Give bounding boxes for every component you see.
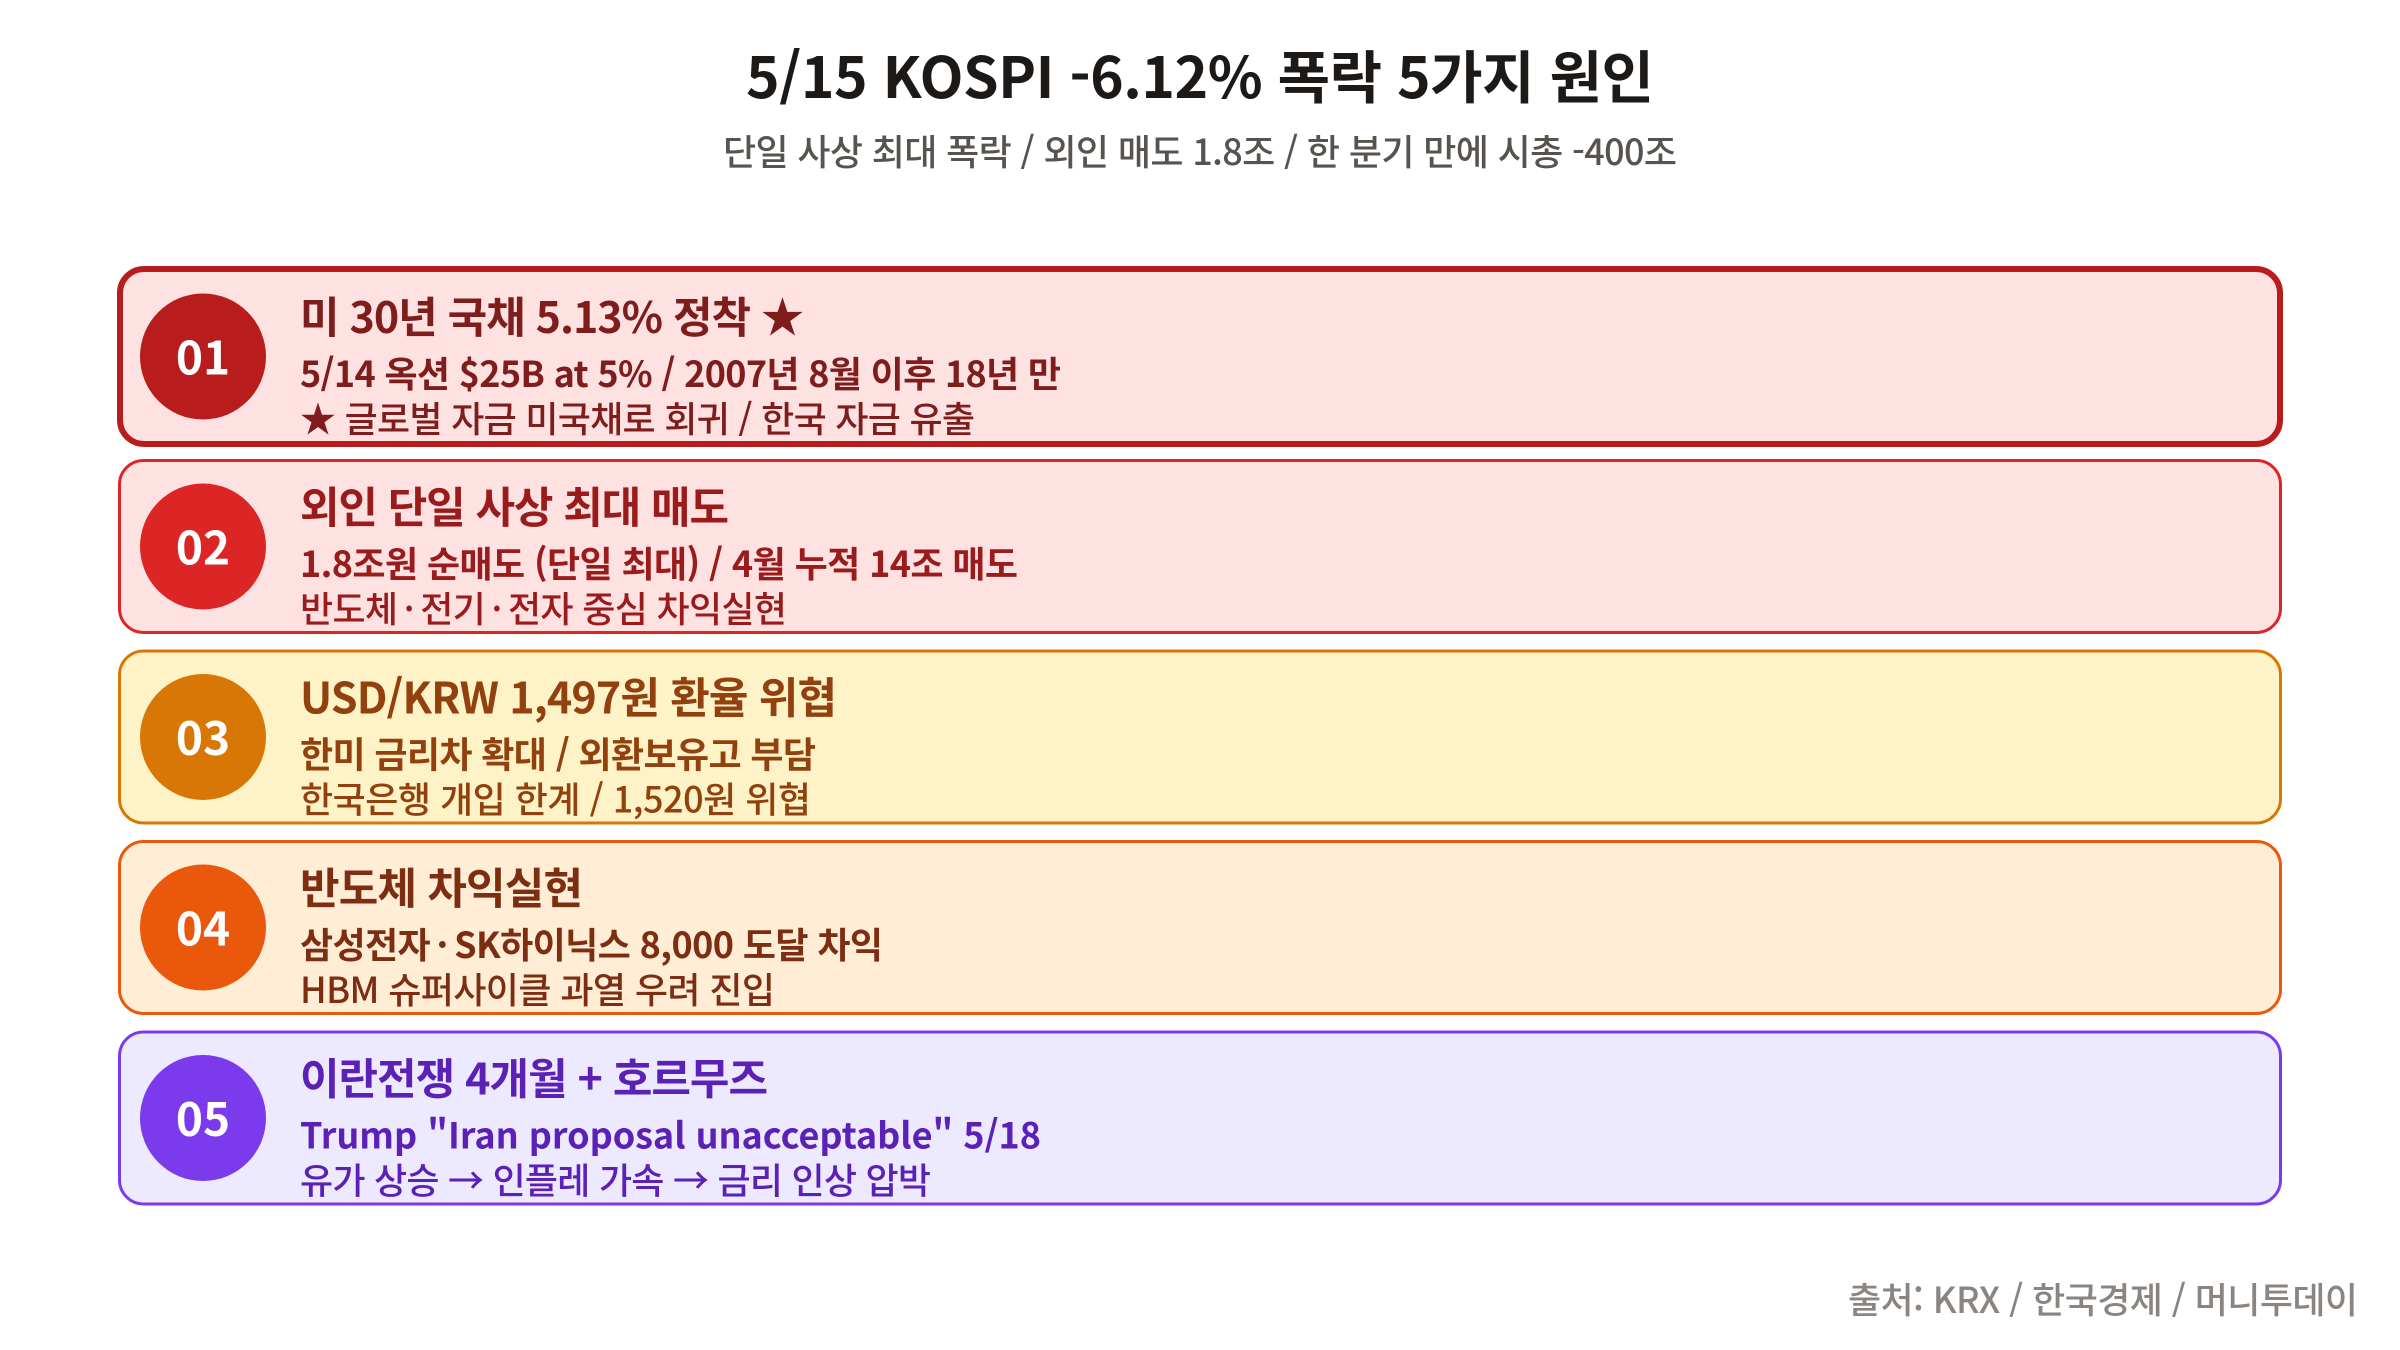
- source: 출처: KRX / 한국경제 / 머니투데이: [1848, 1272, 2358, 1324]
- badge 03: [140, 674, 266, 800]
- note 01: ★ 글로벌 자금 미국채로 회귀 / 한국 자금 유출: [300, 391, 975, 443]
- badge 02: [140, 484, 266, 610]
- detail 02: 1.8조원 순매도 (단일 최대) / 4월 누적 14조 매도: [300, 536, 1018, 588]
- subtitle: 단일 사상 최대 폭락 / 외인 매도 1.8조 / 한 분기 만에 시총 -400조: [723, 124, 1677, 176]
- detail 03: 한미 금리차 확대 / 외환보유고 부담: [300, 726, 816, 778]
- badge 01: 01: [176, 322, 230, 388]
- panel: cause 01: [120, 269, 2280, 444]
- badge 02: 02: [176, 512, 230, 578]
- note 03: 한국은행 개입 한계 / 1,520원 위협: [300, 772, 811, 824]
- heading 03: USD/KRW 1,497원 환율 위협: [300, 664, 837, 726]
- badge 05: 05: [176, 1084, 230, 1150]
- title: 5/15 KOSPI -6.12% 폭락 5가지 원인: [746, 33, 1654, 115]
- note 05: 유가 상승 → 인플레 가속 → 금리 인상 압박: [300, 1152, 931, 1204]
- detail 04: 삼성전자 · SK하이닉스 8,000 도달 차익: [300, 917, 883, 969]
- heading 01: 미 30년 국채 5.13% 정착 ★: [300, 284, 804, 346]
- panel: cause 03: [120, 651, 2280, 824]
- detail 05: Trump "Iran proposal unacceptable" 5/18: [300, 1108, 1041, 1160]
- heading 02: 외인 단일 사상 최대 매도: [300, 474, 729, 536]
- note 02: 반도체 · 전기 · 전자 중심 차익실현: [300, 581, 787, 633]
- badge 01: [140, 294, 266, 420]
- panel: cause 04: [120, 842, 2280, 1014]
- panel: cause 05: [120, 1032, 2280, 1204]
- detail 01: 5/14 옥션 $25B at 5% / 2007년 8월 이후 18년 만: [300, 346, 1061, 398]
- heading 04: 반도체 차익실현: [300, 855, 583, 917]
- badge 03: 03: [176, 703, 230, 769]
- badge 04: 04: [176, 894, 230, 960]
- note 04: HBM 슈퍼사이클 과열 우려 진입: [300, 962, 775, 1014]
- badge 04: [140, 864, 266, 990]
- badge 05: [140, 1055, 266, 1181]
- heading 05: 이란전쟁 4개월 + 호르무즈: [300, 1046, 768, 1108]
- panel: cause 02: [120, 460, 2280, 633]
